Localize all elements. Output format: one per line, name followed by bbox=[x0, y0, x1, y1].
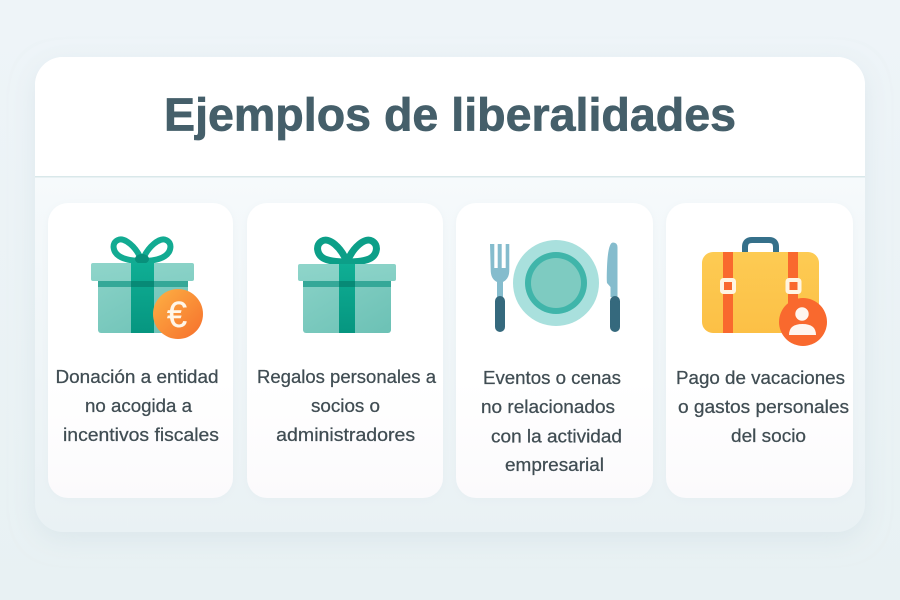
text: gifts: socios o bbox=[311, 396, 380, 416]
euro symbol: € bbox=[167, 294, 187, 335]
text: events: Eventos o cenas bbox=[483, 368, 621, 388]
panel: card events bbox=[456, 203, 653, 498]
text: donation: Donación a entidad bbox=[56, 367, 218, 387]
icon: plate and cutlery bbox=[490, 240, 620, 332]
text: gifts: Regalos personales a bbox=[257, 367, 437, 387]
panel: card gifts bbox=[247, 203, 443, 498]
text: vacations: Pago de vacaciones bbox=[676, 368, 845, 388]
text: gifts bbox=[257, 367, 437, 445]
panel: main container bbox=[35, 57, 865, 532]
icon: gift with euro coin bbox=[91, 239, 203, 339]
text: vacations: o gastos personales bbox=[678, 397, 849, 417]
text: donation bbox=[56, 367, 219, 445]
panel: card donation bbox=[48, 203, 233, 498]
icon: gift bbox=[298, 240, 396, 333]
icon: suitcase with person bbox=[702, 240, 827, 346]
text: gifts: administradores bbox=[276, 425, 415, 445]
text: events: con la actividad bbox=[491, 426, 622, 446]
text: vacations: del socio bbox=[731, 426, 806, 446]
text: events bbox=[481, 368, 622, 475]
panel: card vacations bbox=[666, 203, 853, 498]
text: events: no relacionados bbox=[481, 397, 615, 417]
text: vacations bbox=[676, 368, 849, 446]
title: Ejemplos de liberalidades bbox=[164, 88, 736, 140]
text: events: empresarial bbox=[505, 455, 604, 475]
text: donation: no acogida a bbox=[85, 396, 193, 416]
text: donation: incentivos fiscales bbox=[63, 425, 219, 445]
